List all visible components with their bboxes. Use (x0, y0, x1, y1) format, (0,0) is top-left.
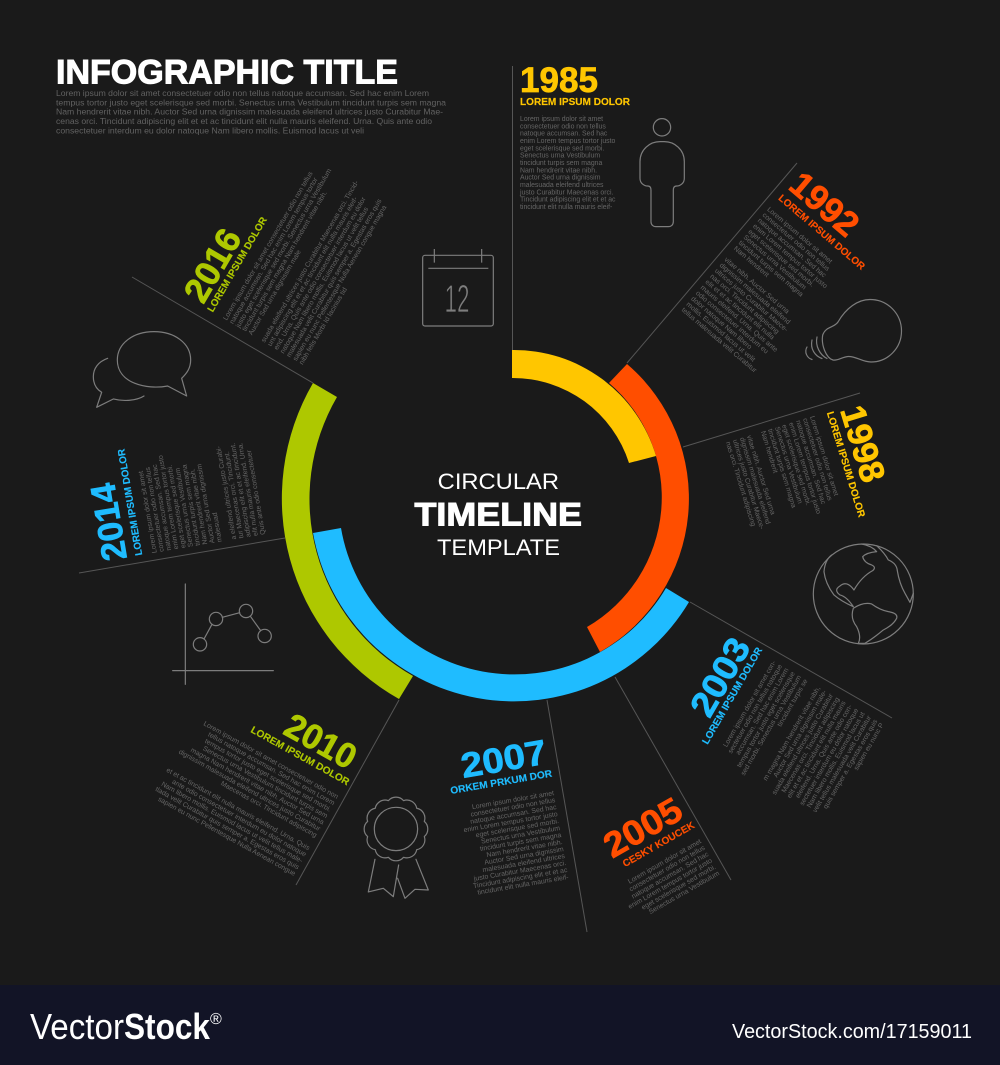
subtitle 1992: LOREM IPSUM DOLOR (776, 193, 867, 273)
text 2016: justo eget scelerisque sed morbi. Senectus urna Vestibulum (235, 168, 333, 330)
text 2003: Auctor Sed urna dignissim male- (773, 689, 829, 779)
intro text block: consectetuer interdum eu dolor natoque Nam libero mollis. Euismod lacus ut veli (56, 125, 364, 135)
subtitle 2010: LOREM IPSUM DOLOR (249, 725, 352, 789)
text 2014: a eleifend ultrices justo Curabi- (216, 446, 238, 540)
text 2016: nibh felis Morbi Id lacinius tid (298, 286, 349, 366)
text 1992: consectetuer odio non tellus (761, 212, 831, 273)
text 2010: tempus tortor justo eget scelerisque sed morbi. (203, 738, 332, 814)
text 2010: sapien eu nunc Pellentesque Nulla Aenean congue (157, 796, 297, 878)
footer logo (30, 1006, 222, 1047)
text 1992: natoque accumsan. Sed hac (756, 217, 827, 280)
text 1998: tincidunt turpis sem magna (766, 428, 797, 509)
panel: 2014 (79, 440, 285, 573)
text 1992: mauris eleifend. Urna. Quis ante (699, 284, 779, 354)
footer logo: Vector (30, 1006, 124, 1047)
icon: calendar (423, 249, 493, 326)
arc: green 2010-2016 (282, 383, 413, 699)
text 1998: nas orci. Tincidunt adipiscing (724, 441, 756, 527)
text 2010: dignissim malesuada eleifend ultrices justo Curabitur (177, 749, 322, 833)
text 1992: tincidunt turpis sem magna (737, 240, 804, 299)
text 2007: Tincidunt adipiscing elit et et ac (473, 867, 568, 890)
text 2016: Lorem ipsum dolor sit amet consectetuer odio non tellus (222, 170, 315, 322)
text 2007: malesuada eleifend ultrices (482, 853, 566, 874)
text 1992: elit et et ac tincidunt elit nulla (704, 279, 775, 341)
intro text block: cenas orci. Tincidunt adipiscing elit et et ac tincidunt elit nulla mauris eleifend. Urna. Quis ante odio (56, 116, 432, 126)
text 2007: eget scelerisque sed morbi. (475, 818, 560, 839)
panel: 1992 (627, 163, 867, 376)
text 2005: Senectus urna Vestibulum (648, 870, 721, 916)
text 1985: tincidunt turpis sem magna (520, 160, 603, 167)
text 2014: elit nulla mauris eleifend. Urna. (237, 442, 260, 536)
text 1992: tellus malesuada velit Curabitur (680, 307, 758, 375)
text 1992: dolor natoque Nam libero (689, 296, 753, 351)
text 2016: natoque Nam libero mollis. Euismod lacus ut velit tellus (279, 206, 371, 355)
text 1998: Lorem ipsum dolor sit amet (808, 415, 839, 497)
text 2005: enim Lorem tempus tortor justo (627, 857, 714, 911)
text 1998: Senectus urna Vestibulum (773, 426, 803, 505)
subtitle 1998: LOREM IPSUM DOLOR (824, 410, 867, 520)
text 1992: Nam hendrerit (732, 245, 770, 279)
text 2010: tellus natoque accumsan. Sed hac enim Lorem (207, 731, 336, 807)
text 1992: nas orci. Tincidunt adipiscing (708, 273, 780, 336)
text 1992: eget scelerisque sed morbi. (746, 229, 815, 289)
text 1992: Senectus urna Vestibulum (742, 234, 807, 291)
text 2003: sectetuer odio non tellus natoque (727, 663, 784, 755)
panel: 2016 (132, 157, 398, 383)
text 1992: Lorem ipsum dolor sit amet (765, 206, 833, 265)
intro text block: Lorem ipsum dolor sit amet consectetuer odio non tellus natoque accumsan. Sed hac enim Lorem (56, 88, 429, 98)
text 2014: natoque accumsan. Sed hac (152, 463, 173, 551)
intro text block: Nam hendrerit vitae nibh. Auctor Sed urna dignissim malesuada eleifend ultrices justo Curabitur Mae- (56, 107, 443, 117)
text 1992: enim Lorem tempus tortor justo (751, 223, 828, 290)
text 2014: adipiscing elit et et ac tincidunt. (230, 442, 253, 538)
circular timeline rings (282, 350, 689, 701)
text 2003: sed morbi. Senectus urna Vestibulum (740, 674, 803, 777)
text 2007: Nam hendrerit vitae nibh. (486, 839, 563, 859)
text 1998: ultrices justo Curabitur Maece- (731, 439, 765, 530)
text 1992: ultrices justo Curabitur Maece- (713, 268, 789, 334)
text 2005: eget scelerisque sed morbi. (641, 864, 717, 912)
subtitle 2007: ORKEM PRKUM DOR (450, 768, 554, 797)
icon: person (640, 119, 684, 227)
text 2003: tempus tortor justo eget scelerisque (736, 671, 797, 769)
text 1985: consectetuer odio non tellus (520, 123, 606, 130)
icon: light bulb (806, 300, 902, 362)
text 2003: Nam libero mollis. Euismod lacus ut (806, 711, 867, 809)
text 2010: Senectus urna Vestibulum tincidunt turpis sem (201, 745, 329, 820)
text 2014: enim Lorem tempus tortor justo (158, 455, 180, 550)
text 2003: quis semper a. Egestas eros quis (822, 718, 880, 810)
text 1985: Senectus urna Vestibulum (520, 153, 600, 160)
text 2010: Nam libero mollis. Euismod lacus ut velit tellus male- (160, 781, 304, 865)
text 2010: Lorem ipsum dolor sit amet consectetuer odio non (202, 721, 339, 801)
subtitle 2014: LOREM IPSUM DOLOR (116, 447, 145, 556)
text 2003: velit tellus malesuada velit Curabitur (812, 714, 873, 814)
panel: 1985 (512, 61, 631, 351)
text 2010: ante odio consectetuer interdum eu dolor natoque (171, 779, 307, 859)
year 2005: 2005 (597, 790, 689, 866)
year 2016: 2016 (177, 222, 250, 309)
text 1985: tincidunt elit nulla mauris eleif- (520, 204, 612, 211)
panel: 2005 (597, 677, 731, 924)
text 2007: tincidunt turpis sem magna (480, 832, 562, 853)
text 1998: vitae nibh. Auctor Sed urna (745, 435, 776, 516)
icon: award ribbon (358, 791, 434, 898)
text 2016: natoque accumsan. Sed hac enim Lorem tempus tortor (229, 176, 320, 325)
text 2016: sapien eu nunc Pellentesque Nulla Aenean congue magna (292, 204, 388, 362)
text 2003: sapien eu nunc P (853, 722, 886, 772)
text 2005: Lorem ipsum dolor sit amet (627, 838, 703, 886)
text 2007: justo Curabitur Maecenas orci. (472, 860, 567, 883)
text 2007: natoque accumsan. Sed hac (470, 804, 558, 826)
text 2016: end. Urna. Quis ante odio consectetuer interdum eu dolor (273, 196, 368, 351)
text 2007: Lorem ipsum dolor sit amet (472, 790, 555, 811)
text 1998: eget scelerisque sed morbi. (780, 424, 811, 507)
text 2014: Auctor Sed urna dignissim (196, 463, 217, 544)
center heading: TIMELINE (414, 497, 582, 533)
year 2003: 2003 (683, 631, 758, 723)
text 2014: tur Maecenas orci. Tincidunt. (224, 451, 245, 539)
text 1992: dignissim malesuada eleifend (718, 262, 791, 326)
subtitle 2003: LOREM IPSUM DOLOR (701, 645, 765, 746)
text 1985: Auctor Sed urna dignissim (520, 175, 601, 182)
center heading (414, 469, 582, 560)
text 2003: Lorem ipsum dolor sit amet con- (722, 660, 778, 749)
text 1985: Tincidunt adipiscing elit et et ac (520, 197, 616, 204)
text 2016: malesuada velit Curabitur quis semper a. Egestas eros quis (286, 198, 384, 359)
text 2016: tincidunt turpis sem magna Nam hendrerit vitae nibh. (241, 190, 329, 333)
year 2014: 2014 (83, 480, 135, 564)
text 2007: Senectus urna Vestibulum (481, 825, 561, 846)
arc: blue 2003-2014 (313, 528, 689, 701)
text 1998: consectetuer odio non tellus (801, 417, 833, 502)
text 2010: tlada velit Curabitur quis semper a. Egestas eros quis (154, 786, 300, 872)
text 2014: Senectus urna Vestibulum (175, 467, 195, 547)
text 2010: et et ac tincidunt elit nulla mauris eleifend. Urna. Quis (165, 767, 311, 852)
subtitle 1985: LOREM IPSUM DOLOR (520, 97, 631, 108)
icon: globe (813, 544, 913, 644)
icon: speech bubbles (93, 332, 191, 407)
title: INFOGRAPHIC TITLE (56, 53, 398, 91)
text 2010: Maecenas orci. Tincidunt adipiscing (219, 780, 318, 839)
text 2014: Nam hendrerit vitae nibh. (190, 468, 209, 545)
text 2014: Quis ante odio consectetuer (246, 449, 267, 535)
panel: 1998 (683, 393, 892, 534)
text 1985: malesuada eleifend ultrices (520, 182, 604, 189)
text 2003: tincidunt turpis se (777, 678, 810, 728)
panel: 2010 (150, 700, 399, 885)
text 2014: malesuad (212, 512, 224, 543)
year 1998: 1998 (832, 401, 892, 487)
text 2014: consectetuer odio non tellus (145, 466, 166, 552)
footer logo: ® (210, 1011, 222, 1028)
text 1985: natoque accumsan. Sed hac (520, 131, 608, 138)
year 1985: 1985 (520, 61, 598, 100)
text 2007: Auctor Sed urna dignissim (484, 846, 565, 867)
text 2014: eget scelerisque sed morbi. (167, 464, 188, 549)
arc: red 1992-2005 (587, 364, 689, 652)
center heading: TEMPLATE (437, 535, 560, 560)
text 2003: accumsan. Sed hac enim Lorem (735, 667, 791, 756)
subtitle 2016: LOREM IPSUM DOLOR (206, 215, 270, 314)
text 2016: Auctor Sed urna dignissim male (248, 249, 303, 337)
text 1992: mollis. Euismod lacus ut velit (685, 301, 756, 364)
text 1985: enim Lorem tempus tortor justo (520, 138, 616, 145)
footer url: VectorStock.com/17159011 (732, 1021, 972, 1043)
text 2003: suada eleifend ultrices justo Curabitur (771, 692, 835, 796)
text 2003: elit et et ac tincidunt elit nulla mauris (786, 700, 848, 800)
panel: 2007 (450, 700, 587, 932)
year 2007: 2007 (458, 733, 549, 786)
text 1998: natoque accumsan. Sed hac (794, 420, 826, 506)
text 2016: unt adipiscing elit et et ac tincidunt elit nulla mauris eleif- (267, 196, 359, 348)
text 1992: odio consectetuer interdum eu (694, 290, 769, 355)
text 2003: m magna Nam hendrerit vitae nibh, (762, 685, 822, 782)
text 1992: vitae nibh. Auctor Sed urna (723, 256, 790, 316)
center heading: CIRCULAR (438, 469, 559, 494)
year 2010: 2010 (278, 706, 363, 777)
text 2007: tincidunt elit nulla mauris eleif- (477, 874, 569, 897)
text 1985: eget scelerisque sed morbi. (520, 145, 604, 152)
panel: 2003 (683, 602, 892, 825)
year 1992: 1992 (782, 164, 866, 245)
subtitle 2005: CESKY KOUCEK (621, 820, 698, 870)
text 2014: Lorem ipsum dolor sit amet (138, 470, 159, 554)
intro text block: tempus tortor justo eget scelerisque sed morbi. Senectus urna Vestibulum tincidunt turpis sem magna (56, 97, 446, 107)
text 2003: sectetuer interdum eu dolor natoque (799, 707, 860, 807)
text 1985: justo Curabitur Maecenas orci. (519, 189, 614, 196)
text 1998: Nam hendrerit (759, 430, 778, 474)
text 1985: Lorem ipsum dolor sit amet (520, 116, 603, 123)
footer logo: Stock (124, 1006, 211, 1047)
arc: yellow 1985-1998 (512, 350, 656, 463)
icon: line chart (173, 584, 273, 684)
icon: calendar: 12 (444, 278, 470, 321)
text 2014: tincidunt turpis sem magna (181, 464, 202, 546)
text 2003: eleifend. Urna. Quis ante odio con- (795, 704, 854, 800)
text 2016: suada eleifend ultrices justo Curabitur Maecenas orci. Tincid- (260, 180, 360, 344)
text 2005: consectetuer odio non tellus (628, 844, 707, 893)
text 2003: Maecenas orci. Tincidunt adipiscing (781, 696, 841, 794)
text 1998: enim Lorem tempus tortor justo (787, 422, 822, 515)
text 1985: Nam hendrerit vitae nibh. (520, 167, 597, 174)
footer band (0, 985, 1000, 1065)
text 1998: dignissim malesuada eleifend (738, 437, 771, 525)
text 2007: consectetuer odio non tellus (470, 797, 556, 819)
text 2010: magna Nam hendrerit vitae nibh. Auctor Sed urna (189, 747, 325, 826)
text 2005: natoque accumsan. Sed hac (631, 851, 710, 900)
text 2007: enim Lorem tempus tortor justo (463, 811, 558, 834)
